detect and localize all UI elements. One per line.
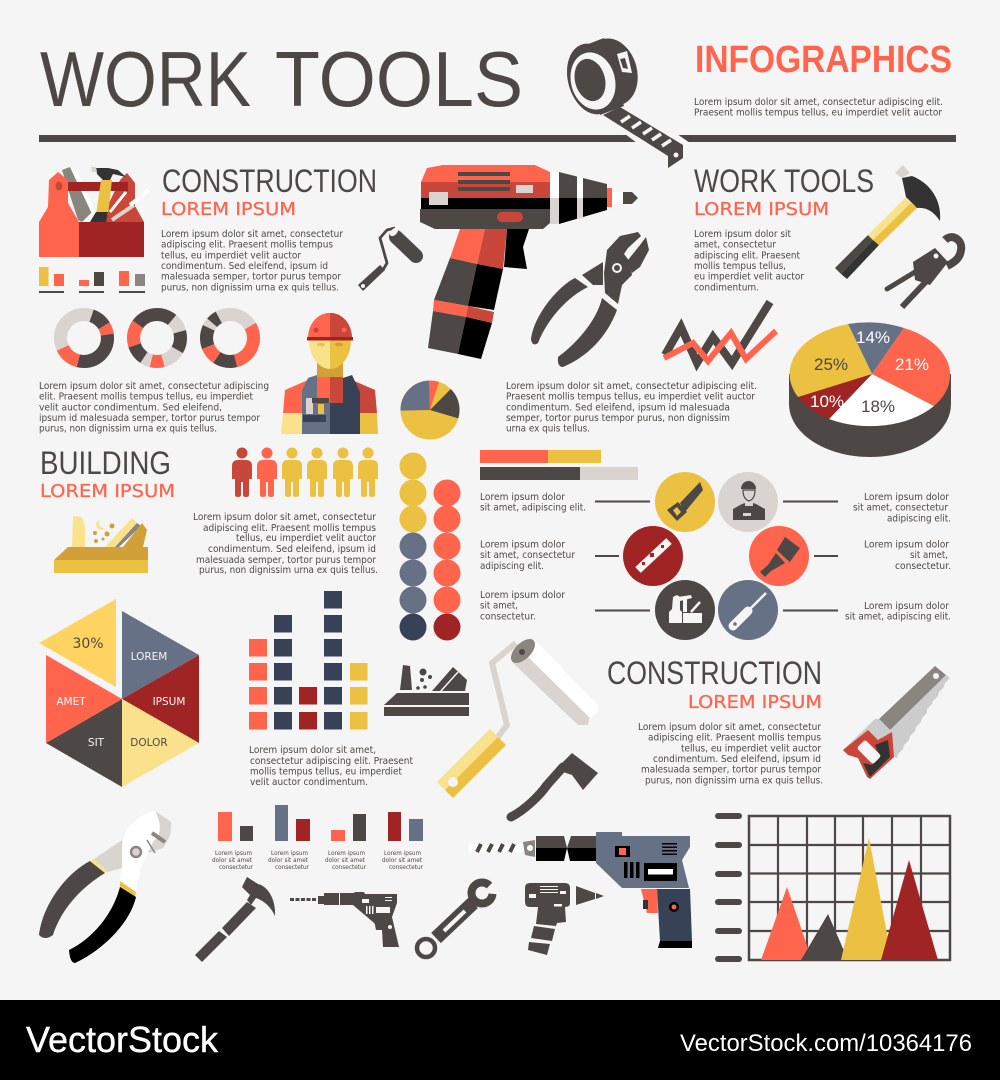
icon: toolbox in dark circle <box>655 580 715 640</box>
footer band <box>0 1000 1000 1080</box>
bar chart captions: dolor sit amet <box>325 857 366 864</box>
hexagon chart: IPSUM <box>153 696 185 708</box>
text block: building: purus, non dignissim urna ex quis tellus. <box>199 565 378 576</box>
bar chart captions: consectetur <box>389 864 424 871</box>
icon: gray corded drill <box>468 832 692 948</box>
3D pie chart: 18% <box>861 397 895 416</box>
text block: work tools: amet, consectetur <box>694 240 776 251</box>
icon: small paint roller <box>358 226 416 291</box>
subheading: lorem ipsum: LOREM IPSUM <box>161 199 296 220</box>
bar chart captions: Lorem ipsum <box>215 850 252 857</box>
text block: construction 2: adipiscing elit. Praesent mollis tempus <box>648 733 821 744</box>
text block: center: Lorem ipsum dolor sit amet, consectetur adipiscing elit. <box>506 381 757 392</box>
infographics heading: INFOGRAPHICS <box>695 39 952 81</box>
text block: under squares <box>249 745 413 788</box>
text block: construction 2 <box>638 722 823 786</box>
icon ring with leader lines <box>595 472 838 640</box>
header text <box>694 97 943 118</box>
right labels of icon ring <box>845 492 951 623</box>
text block: construction 2: Lorem ipsum dolor sit amet, consectetur <box>638 722 821 733</box>
text block: under squares: velit auctor condimentum. <box>250 777 368 788</box>
footer band: VectorStock <box>26 1019 219 1060</box>
people pictogram <box>232 448 378 497</box>
icon: dark wood plane <box>384 665 469 716</box>
icon: big paint roller <box>437 635 598 798</box>
bar chart captions: Lorem ipsum <box>271 850 308 857</box>
left labels of icon ring: sit amet, consectetur <box>480 550 575 561</box>
bar chart captions: Lorem ipsum <box>328 850 365 857</box>
icon: coloured wood plane <box>54 516 148 573</box>
icon: construction worker <box>281 313 378 434</box>
small bar charts under toolbox <box>39 267 145 293</box>
bar chart captions: consectetur <box>332 864 367 871</box>
bar chart captions: consectetur <box>219 864 254 871</box>
donut chart 3 <box>206 314 254 362</box>
right labels of icon ring: Lorem ipsum dolor <box>864 492 949 503</box>
left labels of icon ring: Lorem ipsum dolor <box>480 540 565 551</box>
bar chart captions: dolor sit amet <box>212 857 253 864</box>
text block: construction: adipiscing elit. Praesent mollis tempus <box>161 240 333 251</box>
right labels of icon ring: Lorem ipsum dolor <box>864 601 949 612</box>
text block: building: adipiscing elit. Praesent mollis tempus <box>203 523 376 534</box>
text block: below donuts <box>39 381 269 435</box>
text block: under squares: Lorem ipsum dolor sit amet, <box>249 745 376 756</box>
3D pie chart: 14% <box>856 328 890 347</box>
icon: hammer <box>835 165 940 279</box>
text block: construction: tellus, eu imperdiet velit auctor <box>161 250 301 261</box>
text block: center <box>506 381 757 435</box>
icon: hand saw <box>842 666 950 779</box>
footer band: VectorStock.com/10364176 <box>680 1030 972 1057</box>
right labels of icon ring: Lorem ipsum dolor <box>864 540 949 551</box>
icon: silhouette hammer <box>195 877 275 962</box>
icon: tape measure <box>560 33 690 168</box>
subheading: work tools lorem ipsum: LOREM IPSUM <box>694 199 829 220</box>
text block: construction 2: tellus, eu imperdiet velit auctor <box>681 743 821 754</box>
subheading: construction 2 lorem ipsum: LOREM IPSUM <box>688 692 822 713</box>
left labels of icon ring: Lorem ipsum dolor <box>480 590 565 601</box>
icon: worker in grey circle <box>718 472 778 532</box>
zigzag line chart <box>664 302 776 363</box>
main title: WORK <box>40 35 251 123</box>
dot columns chart <box>400 452 460 640</box>
text block: building: tellus, eu imperdiet velit auctor <box>236 533 376 544</box>
text block: construction: condimentum. Sed eleifend, ipsum id <box>161 261 328 272</box>
bar chart captions: Lorem ipsum <box>384 850 421 857</box>
header text: Lorem ipsum dolor sit amet, consectetur adipiscing elit. <box>694 97 943 108</box>
text block: below donuts: velit auctor condimentum. Sed eleifend, <box>39 402 222 413</box>
3D pie chart <box>789 322 951 457</box>
text block: below donuts: Lorem ipsum dolor sit amet, consectetur adipiscing <box>39 381 269 392</box>
small grouped bar charts <box>218 805 423 841</box>
text block: center: semper, tortor purus tempor purus, non dignissim <box>506 413 730 424</box>
left labels of icon ring: sit amet, <box>480 601 518 612</box>
text block: work tools: mollis tempus tellus, <box>694 261 786 272</box>
icon: hatchet <box>511 753 598 817</box>
text block: construction 2: purus, non dignissim urna ex quis tellus. <box>645 775 823 786</box>
3D pie chart: 21% <box>895 355 929 374</box>
icon: brush in coral circle <box>749 526 809 586</box>
text block: construction: Lorem ipsum dolor sit amet, consectetur <box>161 229 343 240</box>
3D pie chart: 25% <box>814 355 848 374</box>
donut chart 2 <box>134 314 180 362</box>
left labels of icon ring: consectetur. <box>480 611 536 622</box>
left labels of icon ring: sit amet, adipiscing elit. <box>480 503 586 514</box>
text block: construction: purus, non dignissim urna ex quis tellus. <box>161 282 339 293</box>
heading: building: BUILDING <box>40 445 171 481</box>
icon: level in red circle <box>623 526 683 586</box>
text block: work tools: eu imperdiet velit auctor <box>694 272 804 283</box>
left labels of icon ring <box>480 492 586 622</box>
icon: silhouette corded drill <box>290 892 399 947</box>
icon: white and black pliers <box>39 811 171 963</box>
text block: below donuts: purus, non dignissim urna ex quis tellus. <box>39 424 217 435</box>
icon: wrench <box>417 878 507 957</box>
text block: work tools: condimentum. <box>694 282 759 293</box>
hexagon chart: AMET <box>56 696 86 708</box>
text block: construction 2: malesuada semper, tortor purus tempor <box>641 765 821 776</box>
text block: building: malesuada semper, tortor purus tempor <box>196 555 376 566</box>
text block: center: urna ex quis tellus. <box>506 424 590 435</box>
grid area chart <box>715 813 950 962</box>
right labels of icon ring: adipiscing elit. <box>887 513 951 524</box>
heading: construction 2: CONSTRUCTION <box>607 655 822 691</box>
main title: TOOLS <box>275 35 523 123</box>
icon: large dark pliers <box>531 232 649 367</box>
text block: under squares: consectetur adipiscing elit. Praesent <box>250 756 413 767</box>
right labels of icon ring: sit amet, consectetur <box>853 503 948 514</box>
text block: building <box>193 512 378 576</box>
text block: work tools: Lorem ipsum dolor sit <box>694 229 791 240</box>
heading: construction: CONSTRUCTION <box>162 163 377 199</box>
text block: construction <box>161 229 343 293</box>
header rule <box>39 135 956 142</box>
text block: construction 2: condimentum. Sed eleifend, ipsum id <box>653 754 821 765</box>
text block: building: Lorem ipsum dolor sit amet, consectetur <box>193 512 376 523</box>
right labels of icon ring: consectetur. <box>895 561 951 572</box>
bar chart captions: consectetur <box>275 864 310 871</box>
heading: work tools: WORK TOOLS <box>694 163 874 199</box>
hexagon chart: LOREM <box>131 651 167 663</box>
left labels of icon ring: Lorem ipsum dolor <box>480 492 565 503</box>
main title <box>40 35 523 123</box>
icon: silhouette cordless drill <box>525 883 604 955</box>
text block: work tools: adipiscing elit. Praesent <box>694 250 800 261</box>
left labels of icon ring: adipiscing elit. <box>480 561 544 572</box>
icon: screwdriver in slate circle <box>718 580 778 640</box>
bar chart captions: dolor sit amet <box>382 857 423 864</box>
icon: big cordless drill <box>420 165 638 359</box>
hexagon chart <box>39 599 199 787</box>
header text: Praesent mollis tempus tellus, eu imperdiet velit auctor <box>694 108 942 118</box>
text block: center: Praesent mollis tempus tellus, eu imperdiet velit auctor <box>506 392 755 403</box>
hexagon chart: SIT <box>88 737 105 749</box>
small pie chart <box>415 395 445 425</box>
subheading: building lorem ipsum: LOREM IPSUM <box>40 481 175 502</box>
text block: construction: malesuada semper, tortor purus tempor <box>161 272 341 283</box>
text block: building: condimentum. Sed eleifend, ipsum id <box>208 544 376 555</box>
bar chart captions: dolor sit amet <box>268 857 309 864</box>
text block: work tools <box>694 229 804 293</box>
text block: under squares: mollis tempus tellus, eu imperdiet <box>250 766 402 778</box>
3D pie chart: 10% <box>810 392 844 411</box>
donut chart 1 <box>60 314 108 362</box>
icon: pipe wrench <box>887 237 961 307</box>
hexagon chart: 30% <box>72 636 104 652</box>
text block: below donuts: elit. Praesent mollis tempus tellus, eu imperdiet <box>39 392 253 403</box>
icon: toolbox <box>39 167 148 257</box>
right labels of icon ring: sit amet, adipiscing elit. <box>845 612 951 623</box>
bar chart captions <box>212 850 424 871</box>
square column chart <box>249 591 368 730</box>
text block: below donuts: ipsum id malesuada semper, tortor purus tempor <box>39 413 260 424</box>
icon: saw in yellow circle <box>655 472 715 532</box>
stacked progress bars <box>480 450 638 480</box>
hexagon chart: DOLOR <box>130 737 168 749</box>
right labels of icon ring: sit amet, <box>910 550 948 561</box>
text block: center: condimentum. Sed eleifend, ipsum id malesuada <box>506 402 730 413</box>
